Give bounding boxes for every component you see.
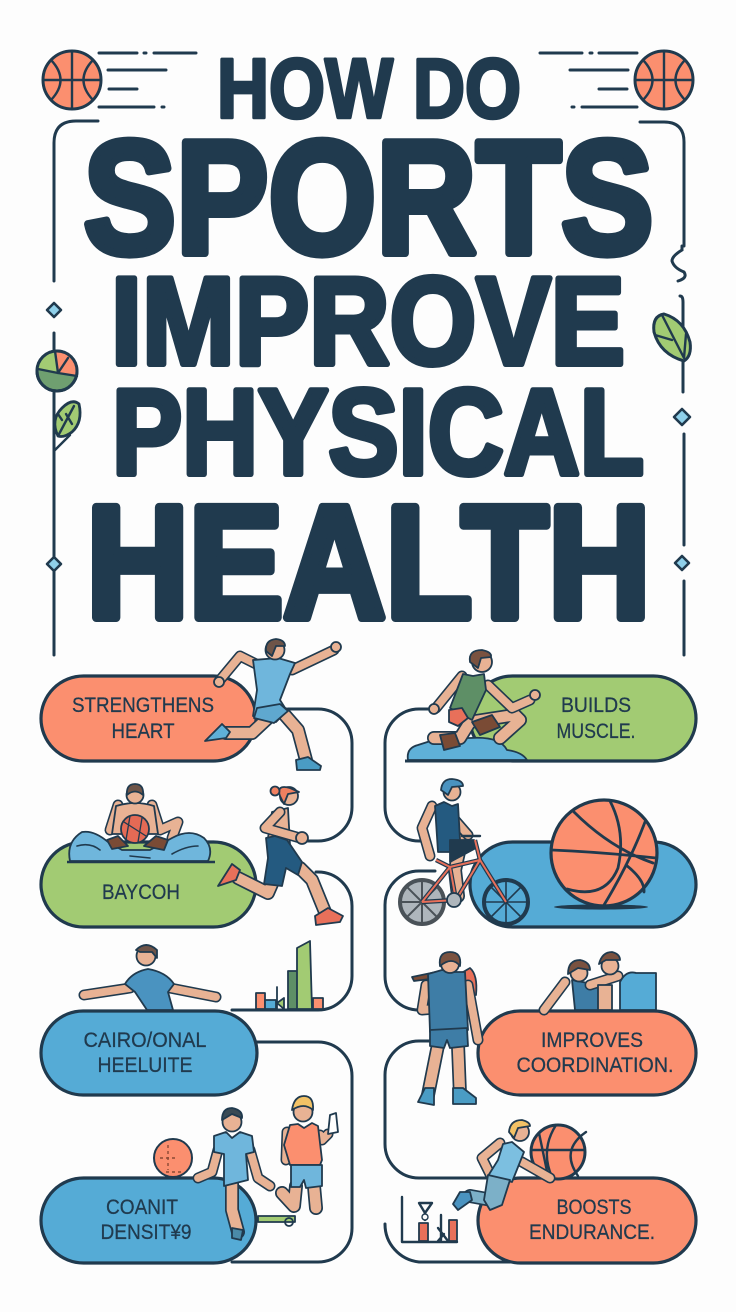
figure: water polo player bbox=[67, 784, 215, 862]
panel: improves coordination bbox=[478, 1011, 696, 1095]
panel: strengthens heart: STRENGTHENS bbox=[72, 694, 214, 717]
panel: builds muscle: MUSCLE. bbox=[556, 720, 636, 743]
connectors right column bbox=[385, 709, 510, 1262]
panel: coanit density: DENSIT¥9 bbox=[100, 1221, 192, 1244]
icon: leaf left bbox=[55, 402, 80, 450]
panel: improves coordination: COORDINATION. bbox=[516, 1054, 674, 1077]
panel: boosts endurance: BOOSTS bbox=[556, 1196, 632, 1219]
figure: cyclist bbox=[400, 779, 528, 924]
figure: orange ball bbox=[154, 1139, 192, 1177]
connectors left column bbox=[232, 709, 352, 1262]
figure: large basketball bbox=[551, 800, 657, 910]
speed lines top right bbox=[540, 53, 637, 107]
panel: baycoh: BAYCOH bbox=[102, 881, 180, 904]
panel: coanit density: COANIT bbox=[106, 1196, 178, 1219]
title: IMPROVE bbox=[111, 253, 625, 391]
figure: hiker with backpack bbox=[412, 952, 478, 1105]
title: HOW DO bbox=[217, 42, 521, 136]
figure: two players with blue box bbox=[544, 952, 656, 1010]
icon: diamond lower left bbox=[47, 557, 61, 571]
figure: runner with basketball bbox=[453, 1120, 586, 1210]
panel: builds muscle: BUILDS bbox=[561, 694, 631, 717]
title: HEALTH bbox=[86, 472, 650, 652]
icon: leaf right bbox=[654, 314, 690, 361]
panel: baycoh bbox=[41, 842, 256, 927]
panel: builds muscle bbox=[405, 676, 696, 761]
panel: boosts endurance bbox=[478, 1178, 696, 1263]
figure: runner in blue bbox=[205, 639, 341, 770]
panel: strengthens heart: HEART bbox=[112, 720, 175, 743]
title: SPORTS bbox=[84, 108, 654, 288]
icon: diamond right middle bbox=[674, 409, 690, 425]
icon: diamond right lower bbox=[675, 556, 689, 570]
panel: cairo/onal heeluite bbox=[41, 1011, 257, 1095]
panel: cairo/onal heeluite: CAIRO/ONAL bbox=[84, 1029, 206, 1052]
title bbox=[84, 42, 654, 652]
icon: pie chart bbox=[37, 351, 78, 391]
figure: man in coral tank bbox=[282, 1096, 338, 1208]
speed lines top left bbox=[99, 53, 196, 107]
panel: cairo/onal heeluite: HEELUITE bbox=[98, 1054, 192, 1077]
panel: boosts endurance: ENDURANCE. bbox=[529, 1221, 655, 1244]
figure: man in blue shirt bbox=[198, 1108, 295, 1240]
panel: improves coordination: IMPROVES bbox=[541, 1029, 643, 1052]
figure: woman in green tank on water bbox=[408, 650, 540, 760]
title: PHYSICAL bbox=[112, 364, 644, 500]
panel: strengthens heart bbox=[41, 676, 256, 761]
figure: man with spread arms bbox=[84, 945, 216, 1010]
decorative frame bbox=[54, 121, 685, 655]
figure: woman runner bbox=[218, 786, 343, 925]
panel: blue basketball pill bbox=[470, 842, 696, 927]
icon: basketball top right bbox=[635, 51, 693, 109]
icon: diamond upper left bbox=[47, 303, 61, 317]
panel: coanit density bbox=[41, 1178, 256, 1263]
icon: basketball top left bbox=[43, 51, 101, 109]
chart: bars and tower bbox=[256, 941, 323, 1009]
chart: small bar icon with trophy bbox=[402, 1197, 457, 1242]
